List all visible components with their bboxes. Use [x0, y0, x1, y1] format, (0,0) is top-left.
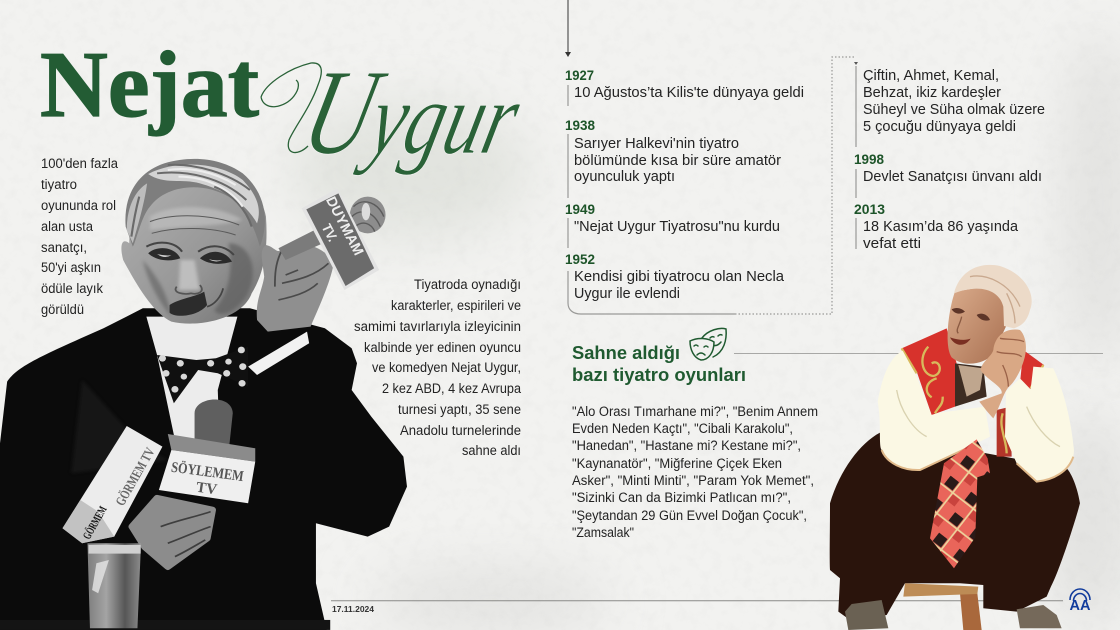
- left intro text: sanatçı,: [41, 240, 87, 255]
- children entry: Çiftin, Ahmet, Kemal,: [863, 68, 999, 84]
- head: [121, 159, 267, 324]
- right-aligned biography text: kalbinde yer edinen oyuncu: [364, 340, 521, 355]
- children entry: Behzat, ikiz kardeşler: [863, 85, 1001, 101]
- 1952 entry: Uygur ile evlendi: [574, 286, 680, 302]
- bow tie: [157, 347, 248, 403]
- necktie: [930, 439, 990, 568]
- children entry: Süheyl ve Süha olmak üzere: [863, 102, 1045, 118]
- left intro text: [41, 156, 118, 317]
- mustache: [170, 292, 207, 316]
- 1927 entry: 10 Ağustos’ta Kilis'te dünyaya geldi: [574, 85, 804, 101]
- DUYMAM microphone: [278, 188, 386, 290]
- hand and forearm: [979, 329, 1026, 418]
- hair: [125, 159, 265, 247]
- children entry: [863, 68, 1045, 135]
- photo: Nejat Uygur in folk costume on stool: [830, 265, 1080, 630]
- 1952 entry: Kendisi gibi tiyatrocu olan Necla: [574, 269, 785, 285]
- 2013 entry: [854, 201, 1019, 252]
- right-aligned biography text: Tiyatroda oynadığı: [414, 277, 521, 292]
- logo: AA: AA: [1070, 597, 1091, 614]
- lower hand: [132, 498, 212, 567]
- water glass: [87, 543, 141, 628]
- logo: AA: [1070, 589, 1091, 614]
- left intro text: ödüle layık: [41, 281, 103, 296]
- right-aligned biography text: samimi tavırlarıyla izleyicinin: [354, 319, 521, 334]
- 1949 entry: "Nejat Uygur Tiyatrosu"nu kurdu: [574, 219, 780, 235]
- neck and scarf: [955, 363, 987, 407]
- right-aligned biography text: ve komedyen Nejat Uygur,: [372, 360, 521, 375]
- right-aligned biography text: turnesi yaptı, 35 sene: [398, 402, 521, 417]
- cuff: [248, 332, 309, 375]
- plays list: "Alo Orası Tımarhane mi?", "Benim Annem: [572, 404, 818, 420]
- plays list: "Şeytandan 29 Gün Evvel Doğan Çocuk",: [572, 508, 807, 524]
- stool: [903, 583, 982, 630]
- DUYMAM microphone: TV.: [318, 221, 341, 244]
- icon: theatre masks: [690, 328, 726, 360]
- trousers: [830, 433, 1080, 620]
- plays list: "Sizinki Can da Bizimki Patlıcan mı?",: [572, 490, 791, 506]
- left intro text: alan usta: [41, 219, 93, 234]
- photo: Nejat Uygur in black suit with microphones: [0, 159, 407, 630]
- children entry: 5 çocuğu dünyaya geldi: [863, 119, 1016, 135]
- title: Uygur script: Uygur: [291, 45, 536, 180]
- face shading: [214, 243, 253, 314]
- 1938 entry: bölümünde kısa bir süre amatör: [574, 153, 781, 169]
- vest: [902, 328, 1044, 457]
- 1938 entry: oyunculuk yaptı: [574, 169, 675, 185]
- left intro text: 100'den fazla: [41, 156, 118, 171]
- title: Nejat: Nejat: [40, 33, 259, 137]
- left intro text: tiyatro: [41, 177, 77, 192]
- 1998 entry: Devlet Sanatçısı ünvanı aldı: [863, 169, 1042, 185]
- shoes: [845, 600, 888, 630]
- timeline column 1: [565, 67, 804, 302]
- 1949 entry: 1949: [565, 201, 595, 217]
- 1952 entry: [565, 251, 785, 302]
- 1998 entry: [854, 151, 1042, 185]
- plays list: [572, 404, 818, 541]
- timeline connector: [565, 0, 858, 314]
- left intro text: oyununda rol: [41, 198, 116, 213]
- DUYMAM microphone: DUYMAM: [323, 194, 367, 258]
- raised hand: [257, 244, 334, 332]
- 2013 entry: 2013: [854, 201, 885, 217]
- eyes: [148, 248, 232, 264]
- GÖRMEM microphone: [62, 426, 162, 543]
- head: [948, 265, 1032, 364]
- right-aligned biography text: sahne aldı: [462, 443, 521, 458]
- timeline column 2: [854, 68, 1045, 252]
- section heading: plays: Sahne aldığı: [572, 342, 680, 363]
- left intro text: 50'yi aşkın: [41, 260, 101, 275]
- rule: [734, 352, 1103, 354]
- SÖYLEMEM microphone: [159, 400, 255, 503]
- 1938 entry: [565, 117, 781, 185]
- plays list: "Kaynanatör", "Miğferine Çiçek Eken: [572, 456, 782, 472]
- GÖRMEM microphone: GÖRMEM TV: [112, 445, 158, 508]
- right-aligned biography text: [354, 277, 521, 458]
- table edge: [0, 620, 330, 630]
- SÖYLEMEM microphone: TV: [195, 480, 218, 498]
- shirt: [146, 317, 237, 440]
- left intro text: görüldü: [41, 302, 84, 317]
- plays list: "Zamsalak": [572, 525, 634, 541]
- 2013 entry: vefat etti: [863, 236, 921, 252]
- 1952 entry: 1952: [565, 251, 595, 267]
- 1927 entry: [565, 67, 804, 101]
- 1927 entry: 1927: [565, 67, 594, 83]
- nose: [176, 285, 202, 294]
- suit: [0, 308, 407, 630]
- plays list: Asker", "Minti Minti", "Param Yok Memet",: [572, 473, 814, 489]
- SÖYLEMEM microphone: SÖYLEMEM: [170, 459, 245, 485]
- shirt sleeves: [878, 351, 1074, 482]
- 1938 entry: 1938: [565, 117, 595, 133]
- 1998 entry: 1998: [854, 151, 884, 167]
- right-aligned biography text: Anadolu turnelerinde: [400, 423, 521, 438]
- right-aligned biography text: 2 kez ABD, 4 kez Avrupa: [382, 381, 521, 396]
- plays list: "Hanedan", "Hastane mi? Kestane mi?",: [572, 438, 801, 454]
- 2013 entry: 18 Kasım’da 86 yaşında: [863, 219, 1019, 235]
- 1949 entry: [565, 201, 780, 235]
- plays list: Evden Neden Kaçtı", "Cibali Karakolu",: [572, 421, 793, 437]
- right-aligned biography text: karakterler, espirileri ve: [391, 298, 521, 313]
- GÖRMEM microphone: GÖRMEM: [80, 504, 110, 541]
- section heading: plays: [572, 342, 746, 385]
- section heading: plays: bazı tiyatro oyunları: [572, 364, 746, 385]
- footer rule and date: 17.11.2024: [332, 605, 375, 614]
- 1938 entry: Sarıyer Halkevi'nin tiyatro: [574, 136, 739, 152]
